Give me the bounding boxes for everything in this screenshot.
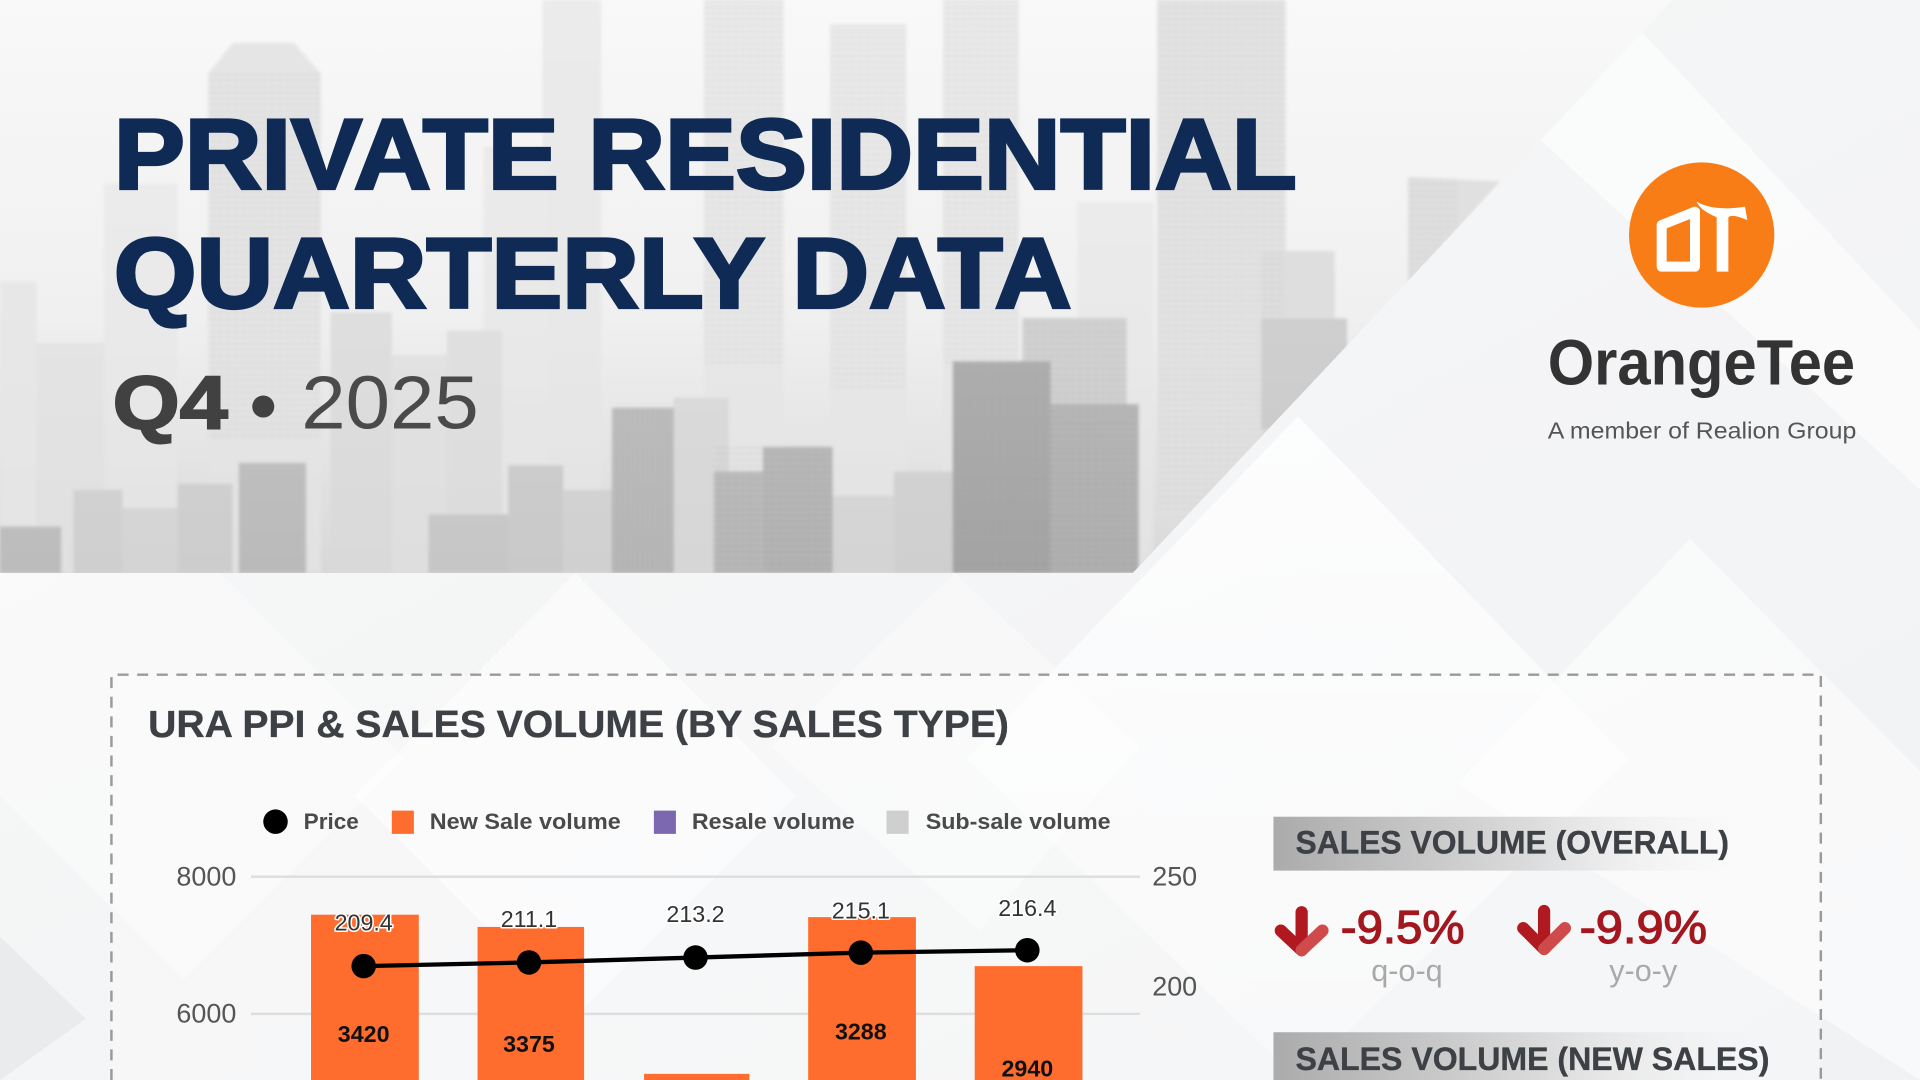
stat block: sales volume overall: SALES VOLUME (OVERALL) — [1296, 824, 1729, 860]
stat: -9.5% q-o-q: q-o-q — [1371, 954, 1443, 988]
right axis labels — [1152, 861, 1197, 1002]
price labels: 209.4 — [335, 910, 393, 936]
stat: -9.9% y-o-y: y-o-y — [1609, 954, 1678, 988]
price labels: 216.4 — [998, 895, 1057, 921]
price labels: 215.1 — [832, 897, 890, 923]
stat: -9.5% q-o-q: -9.5% — [1341, 901, 1464, 953]
chart legend — [263, 809, 1111, 834]
title: PRIVATE RESIDENTIAL — [114, 100, 1297, 211]
icon: down arrow q-o-q — [1281, 912, 1322, 950]
price labels — [335, 895, 1057, 936]
tagline: A member of Realion Group — [1548, 417, 1856, 443]
title — [114, 100, 1297, 329]
icon: OT logo mark — [1629, 162, 1774, 308]
right axis labels: 250 — [1152, 861, 1197, 891]
bar value labels: 3375 — [503, 1031, 555, 1057]
chart legend: New Sale volume — [430, 809, 621, 834]
combo chart: price line over stacked volume bars — [176, 861, 1197, 1080]
stat block: sales volume overall — [1273, 817, 1745, 988]
left axis labels: 8000 — [176, 861, 236, 891]
chart legend: Price — [304, 809, 359, 834]
price labels: 211.1 — [501, 906, 557, 932]
skyline header image — [0, 0, 1499, 573]
left axis labels — [176, 861, 236, 1028]
stat block: sales volume new sales: SALES VOLUME (NEW SALES) — [1296, 1041, 1769, 1077]
bar value labels: 3420 — [338, 1021, 390, 1047]
left axis labels: 6000 — [176, 998, 236, 1028]
stat: -9.5% q-o-q — [1341, 901, 1464, 988]
logo: OrangeTee — [1548, 162, 1856, 443]
stat: -9.9% y-o-y: -9.9% — [1580, 901, 1707, 953]
right axis labels: 200 — [1152, 972, 1197, 1002]
chart legend: Resale volume — [692, 809, 855, 834]
bar value labels — [338, 1019, 1053, 1080]
subtitle: quarter and year: 2025 — [301, 361, 479, 445]
panel: URA PPI and sales volume — [111, 675, 1821, 1080]
chart legend: Sub-sale volume — [926, 809, 1111, 834]
price labels: 213.2 — [666, 901, 725, 927]
icon: down arrow y-o-y — [1523, 911, 1565, 949]
subtitle: quarter and year: Q4 — [113, 361, 228, 445]
price line — [351, 938, 1040, 978]
bar value labels: 3288 — [835, 1019, 887, 1045]
distant towers — [0, 0, 1500, 573]
new sale bars — [311, 915, 1082, 1080]
title: QUARTERLY DATA — [114, 218, 1071, 329]
wordmark: OrangeTee — [1548, 327, 1855, 398]
stat: -9.9% y-o-y — [1580, 901, 1707, 988]
middle blocks — [330, 312, 392, 468]
subtitle: quarter and year — [113, 361, 479, 445]
panel heading: URA PPI & SALES VOLUME (BY SALES TYPE) — [148, 704, 1009, 746]
foreground blocks — [953, 361, 1051, 573]
